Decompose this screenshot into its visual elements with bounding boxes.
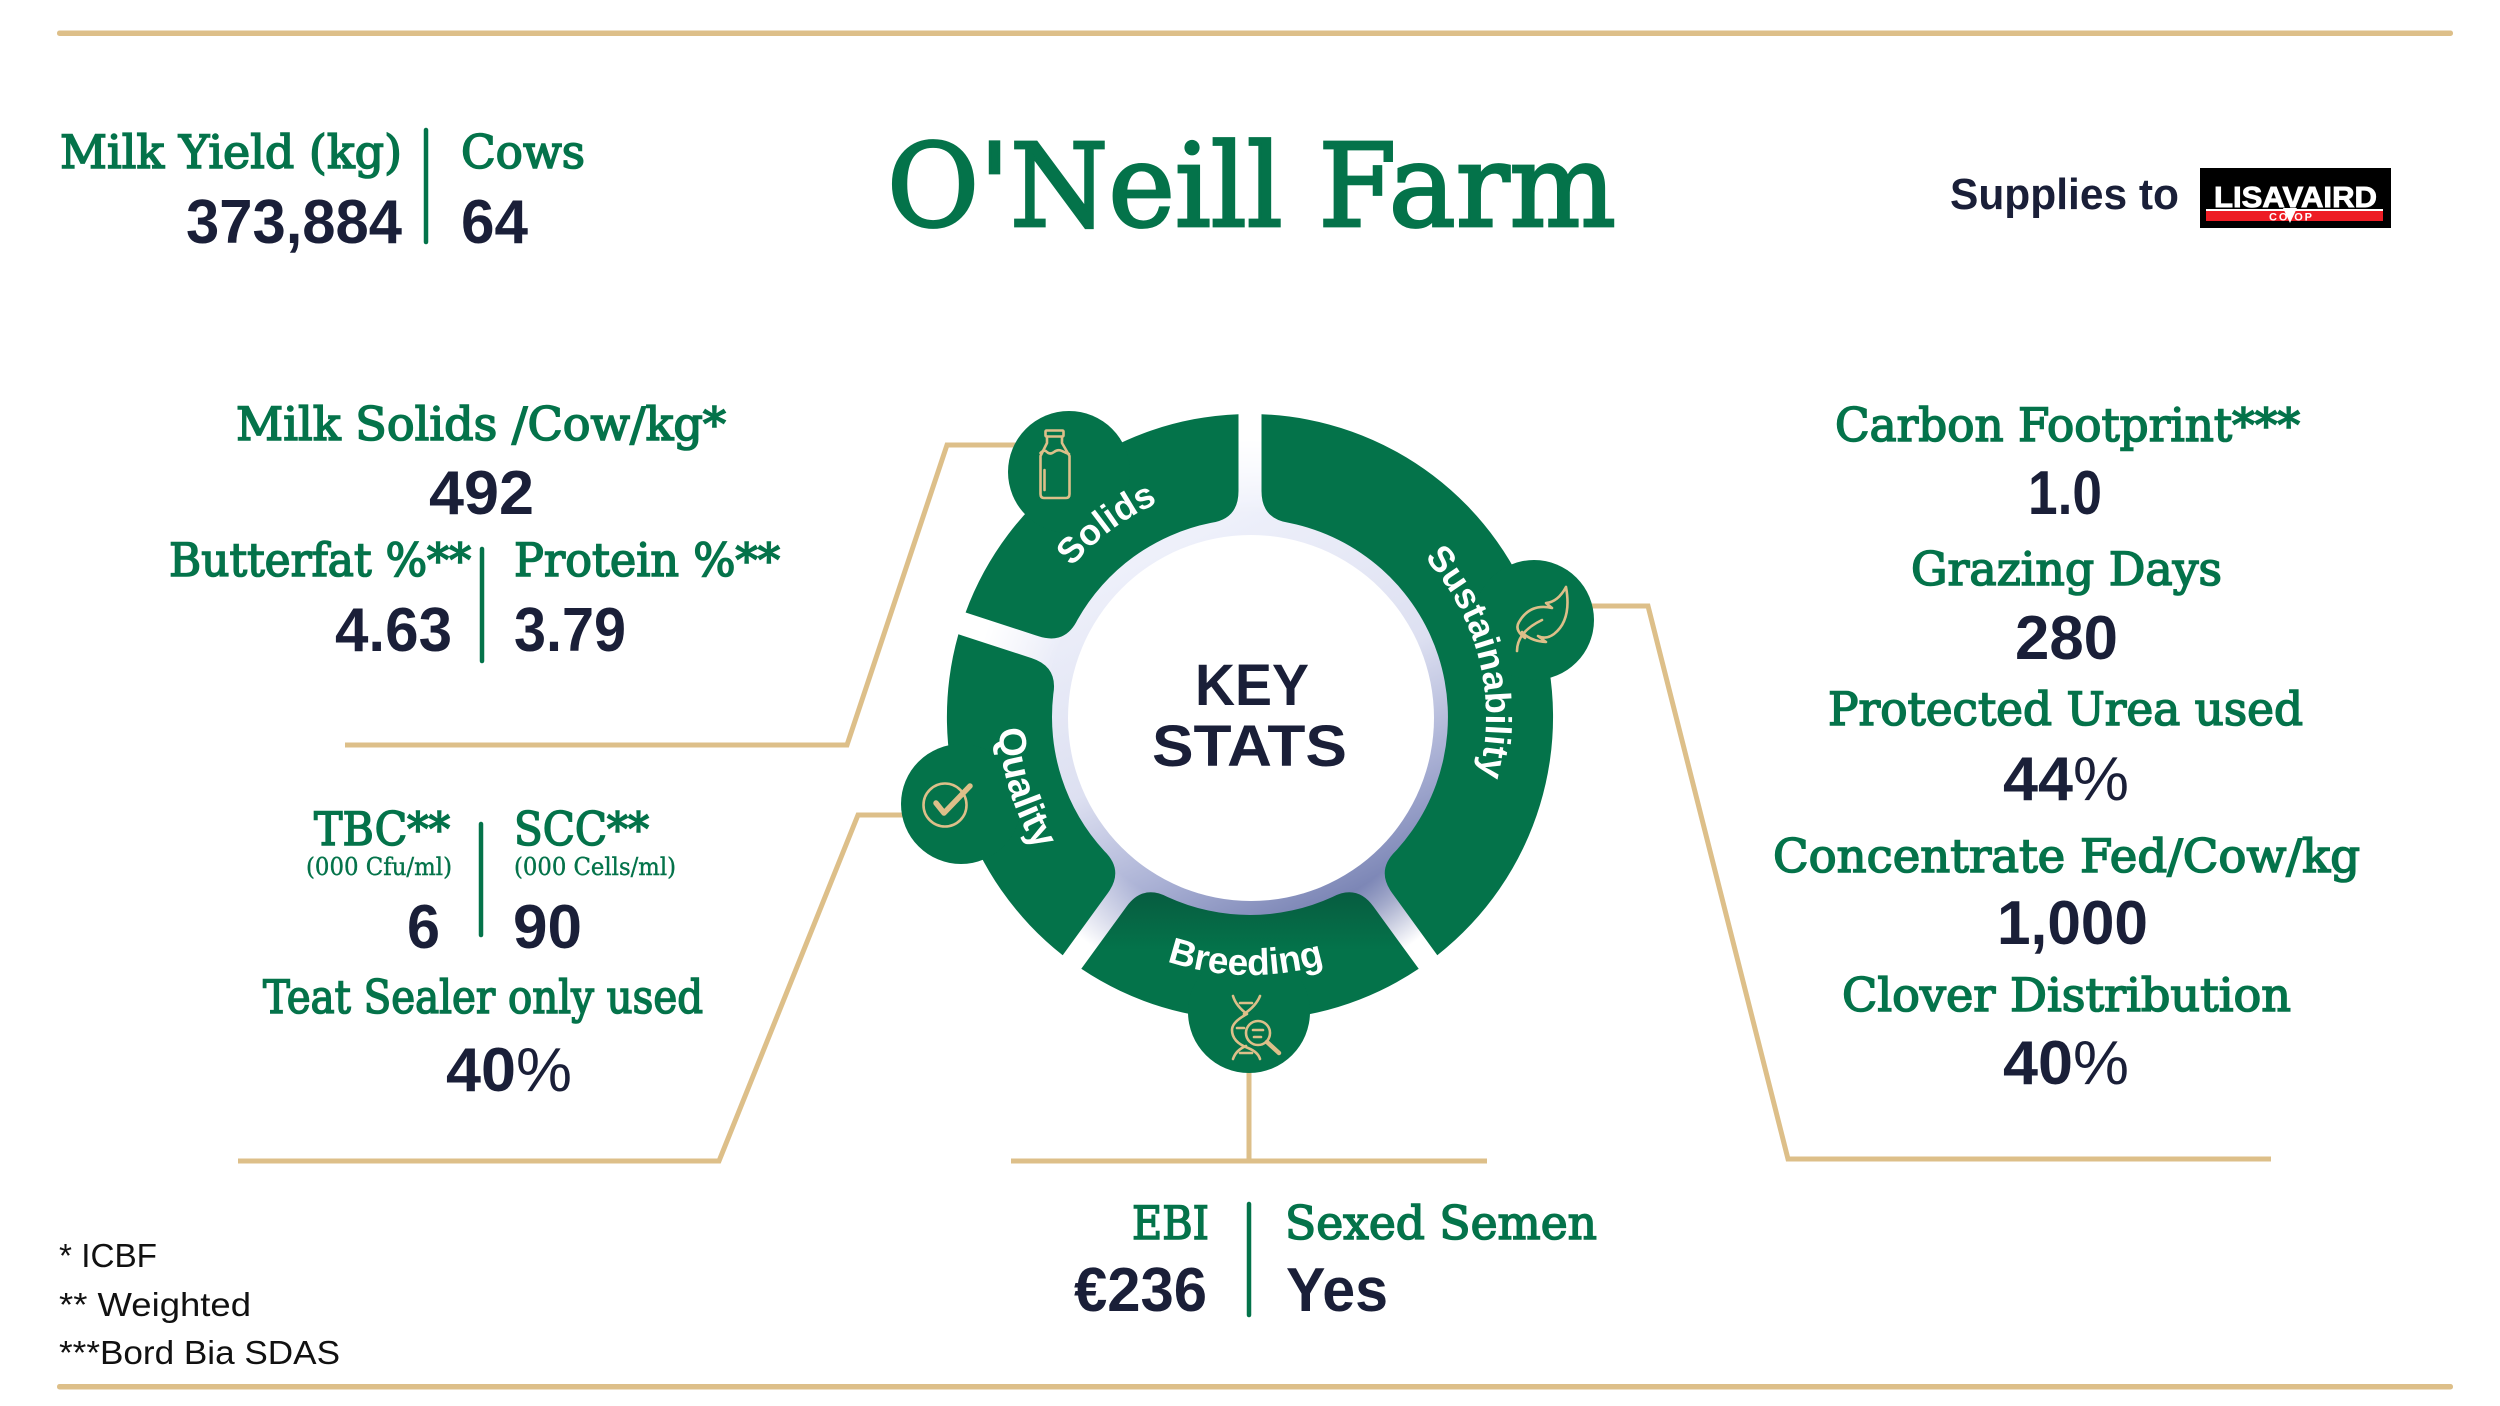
icon badge: quality — [901, 744, 1021, 864]
panel: quality stats — [263, 802, 703, 1105]
panel: sustainability stats: 44% — [2003, 745, 2129, 814]
icon badge: sustainability — [1474, 560, 1594, 680]
footnotes: * ICBF — [59, 1237, 157, 1274]
panel: breeding stats: €236 — [1074, 1256, 1207, 1325]
bottom rule — [57, 1384, 2453, 1390]
label: solids: Solids — [1058, 488, 1155, 563]
panel: quality stats: 40% — [446, 1036, 572, 1105]
panel: sustainability stats: 280 — [2015, 604, 2118, 673]
footnotes — [59, 1237, 340, 1371]
footnotes: ***Bord Bia SDAS — [59, 1334, 340, 1371]
label: sustainability: Sustainability — [1428, 546, 1512, 780]
centre halo — [1012, 479, 1448, 945]
connector: quality — [238, 815, 910, 1161]
panel: sustainability stats: Protected Urea used — [1828, 682, 2303, 736]
icon: leaf — [1517, 587, 1568, 651]
label: quality: Quality — [993, 728, 1054, 844]
panel: solids stats: Milk Solids /Cow/kg* — [236, 397, 726, 451]
panel: sustainability stats: 1.0 — [2028, 459, 2102, 528]
panel: quality stats: Teat Sealer only used — [263, 970, 703, 1024]
logo: Lisavaird Co-op — [2200, 168, 2391, 228]
footnotes: ** Weighted — [59, 1286, 251, 1323]
panel: quality stats: TBC** — [314, 802, 450, 856]
stat: milk yield and cows — [60, 125, 585, 257]
logo: Lisavaird Co-op: LISAVAIRD — [2214, 182, 2377, 214]
stat: milk yield and cows: Cows — [461, 125, 585, 179]
connector: solids — [345, 445, 1016, 745]
icon: milk bottle — [1040, 430, 1070, 498]
key stats wheel — [901, 411, 1594, 1073]
panel: solids stats: 492 — [429, 459, 534, 528]
segment: sustainability — [1262, 414, 1553, 955]
segment: solids — [966, 414, 1238, 638]
logo: Lisavaird Co-op: CO OP — [2269, 212, 2312, 224]
label: breeding: Breeding — [1169, 938, 1322, 976]
panel: breeding stats: Yes — [1286, 1256, 1388, 1325]
connector: breeding — [1011, 1060, 1487, 1161]
segment: breeding — [1081, 892, 1419, 1020]
panel: sustainability stats: 40% — [2003, 1029, 2129, 1098]
panel: solids stats: 4.63 — [335, 596, 452, 665]
panel: breeding stats: Sexed Semen — [1285, 1196, 1597, 1250]
icon: dna with magnifier — [1232, 996, 1279, 1059]
centre heading — [1152, 653, 1347, 779]
stat: milk yield and cows: Milk Yield (kg) — [60, 125, 402, 179]
panel: sustainability stats: Clover Distribution — [1842, 968, 2291, 1022]
centre heading: KEY — [1195, 653, 1309, 718]
icon badge: solids — [1008, 411, 1130, 533]
panel: quality stats: 6 — [407, 893, 440, 962]
top rule — [57, 30, 2453, 36]
panel: quality stats: (000 Cfu/ml) — [306, 853, 452, 881]
panel: solids stats — [169, 397, 780, 665]
panel: solids stats: Butterfat %** — [169, 533, 471, 587]
title: O'Neill Farm — [887, 120, 1616, 254]
centre heading: STATS — [1152, 714, 1347, 779]
panel: sustainability stats: 1,000 — [1997, 889, 2148, 958]
supplies to: Supplies to — [1950, 170, 2179, 219]
panel: solids stats: Protein %** — [514, 533, 780, 587]
icon badge: breeding — [1188, 951, 1310, 1073]
panel: sustainability stats: Grazing Days — [1911, 542, 2222, 596]
panel: breeding stats: EBI — [1132, 1196, 1209, 1250]
panel: quality stats: 90 — [513, 893, 582, 962]
stat: milk yield and cows: 373,884 — [186, 188, 402, 257]
panel: quality stats: (000 Cells/ml) — [514, 853, 676, 881]
connector: sustainability — [1590, 606, 2271, 1159]
icon: check mark — [924, 784, 970, 826]
centre disc — [1068, 535, 1434, 901]
panel: quality stats: SCC** — [514, 802, 649, 856]
panel: breeding stats — [1074, 1196, 1597, 1325]
panel: sustainability stats: Carbon Footprint*** — [1835, 398, 2300, 452]
panel: solids stats: 3.79 — [514, 596, 626, 665]
segment: quality — [947, 634, 1115, 955]
stat: milk yield and cows: 64 — [461, 188, 528, 257]
panel: sustainability stats: Concentrate Fed/Cow/kg — [1773, 829, 2360, 883]
supplies to — [1950, 168, 2391, 228]
panel: sustainability stats — [1773, 398, 2360, 1098]
